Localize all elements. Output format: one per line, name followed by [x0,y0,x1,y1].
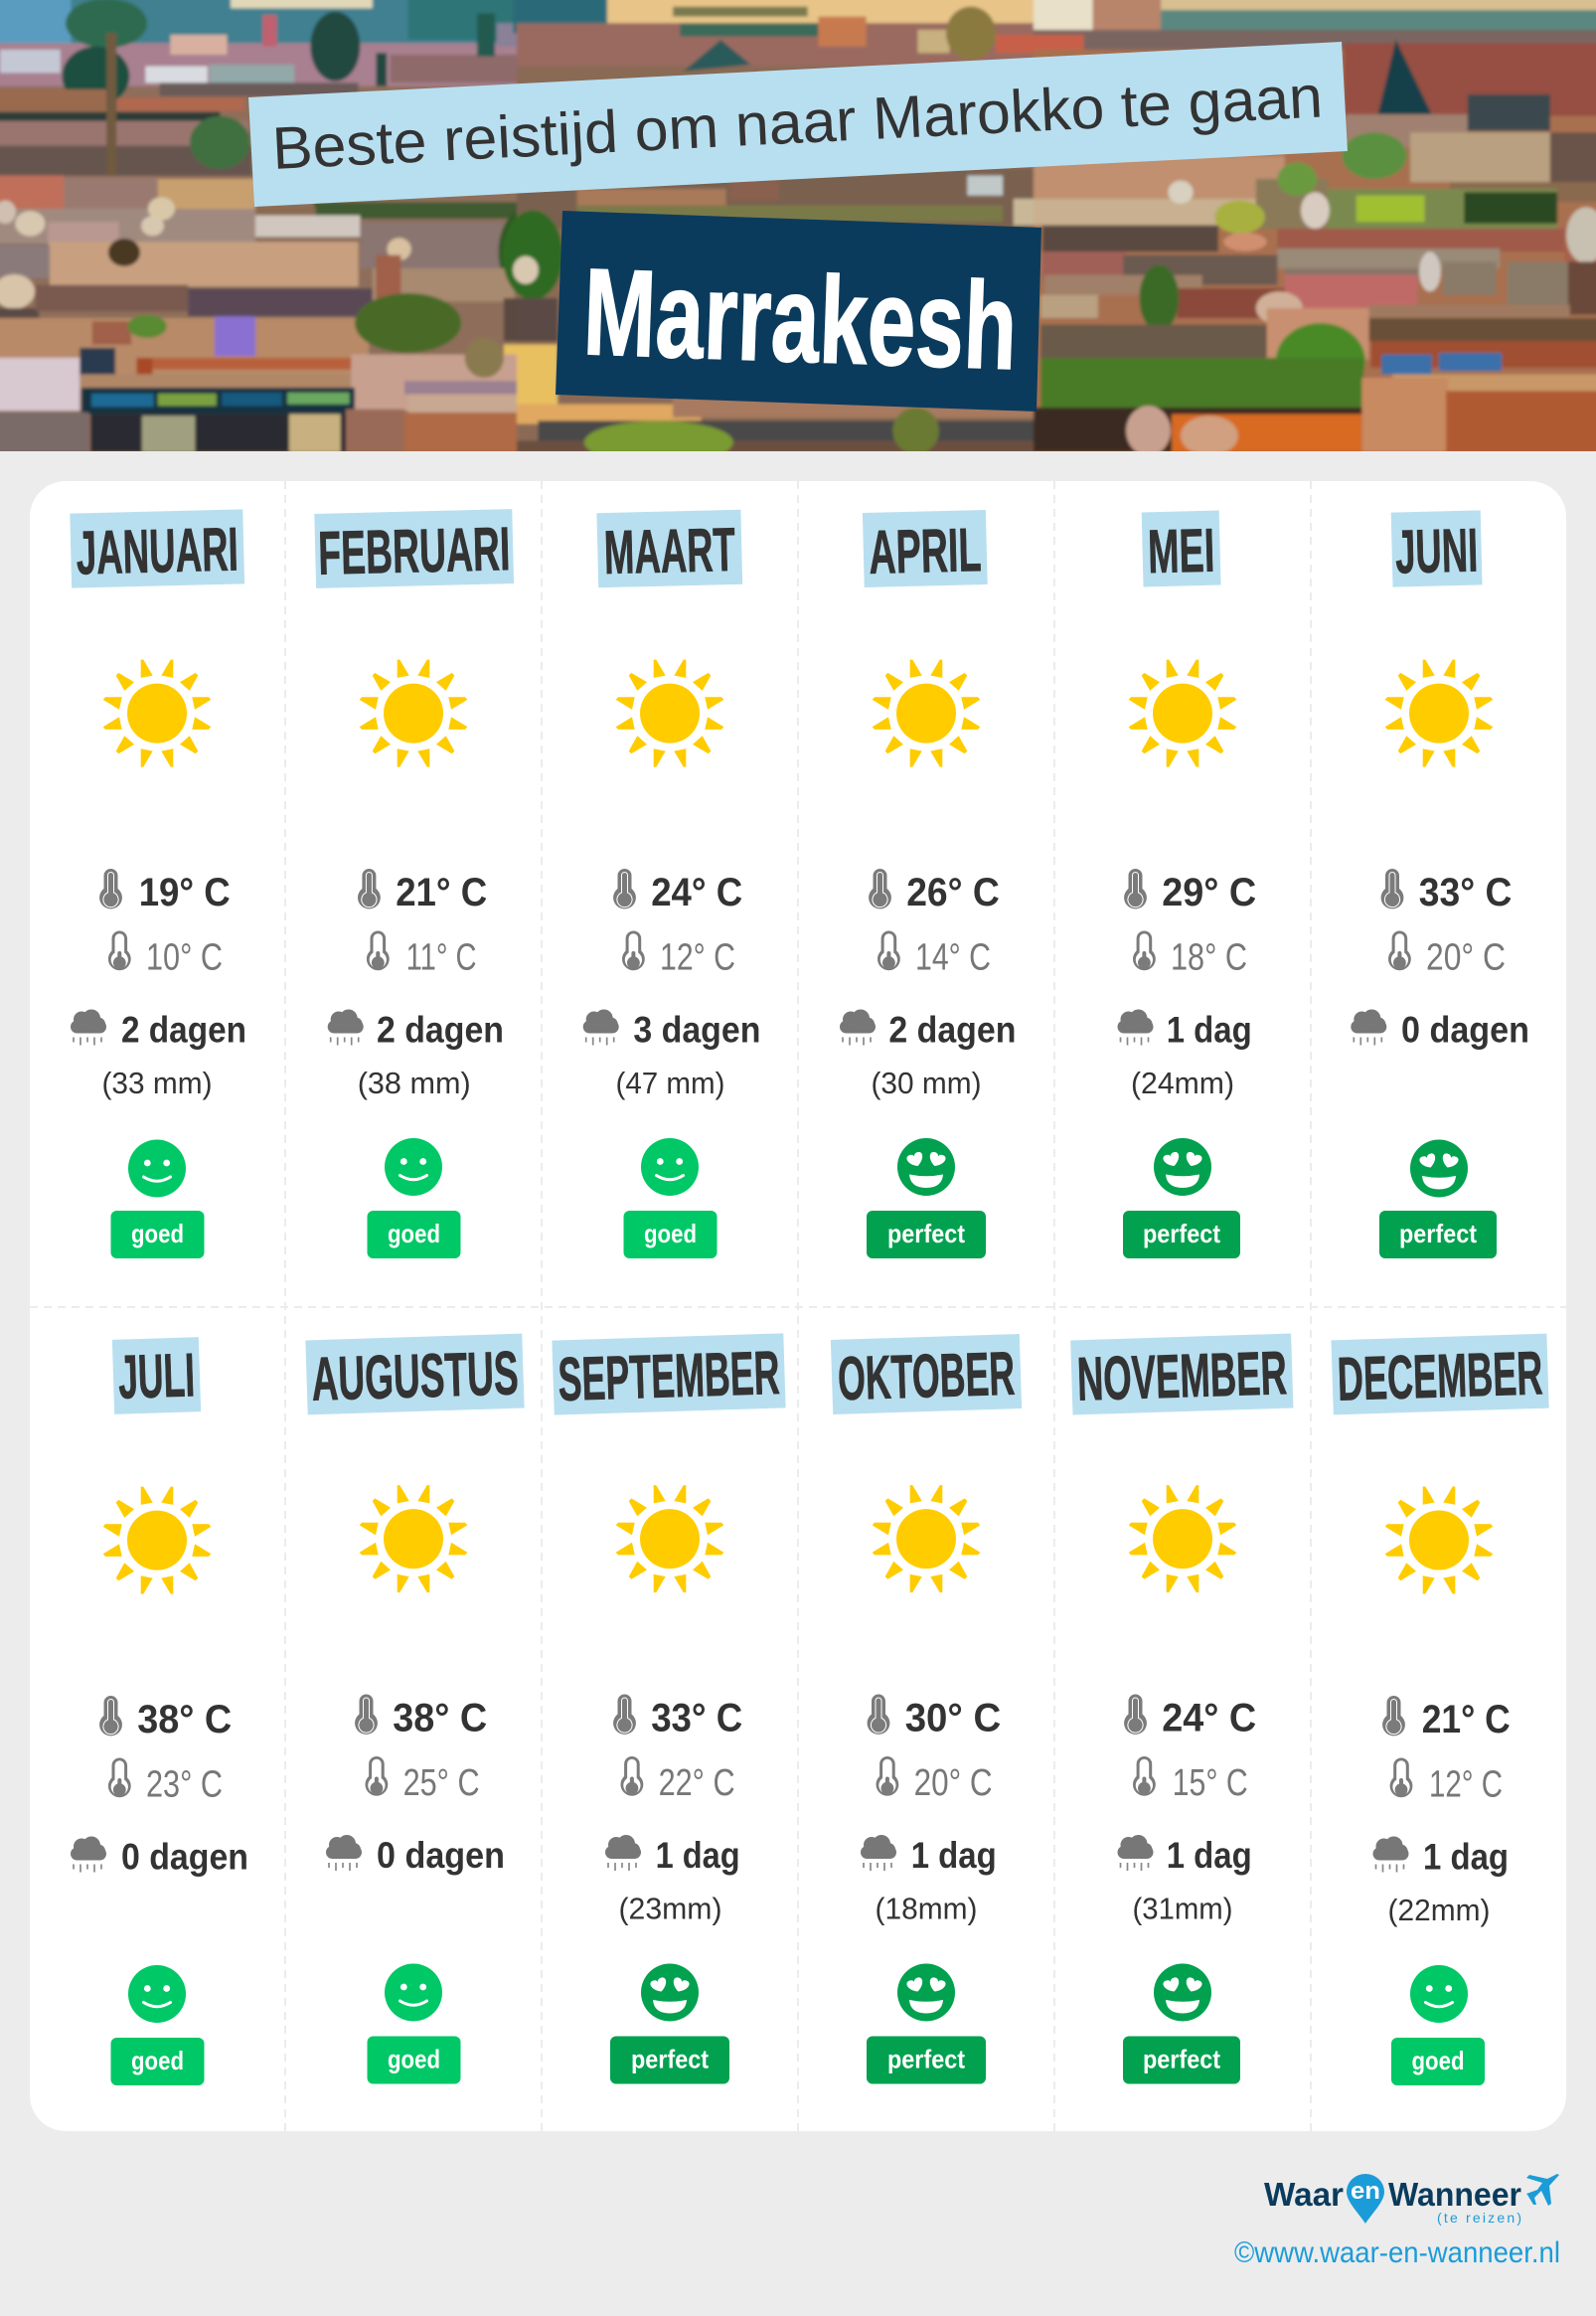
month: maart: 3 dagen [633,1010,760,1051]
month: maart: (47 mm) [616,1066,725,1100]
month: juli [71,1337,248,2085]
month: maart: 24° C [651,871,742,914]
month: februari: 21° C [396,871,487,914]
month: maart: 12° C [660,936,735,978]
month: juli: JULI [117,1341,196,1412]
month: november: 15° C [1173,1762,1248,1804]
logo: Waar en Wanneer [1264,2174,1559,2226]
month: oktober: OKTOBER [837,1340,1016,1413]
banner: title: Beste reistijd om naar Marokko te gaan [270,63,1324,182]
month: december: (22mm) [1387,1893,1491,1927]
month: oktober: 20° C [914,1762,993,1804]
month: februari [314,509,514,1258]
month: juni: JUNI [1394,516,1479,587]
logo: Waar en Wanneer: Wanneer [1388,2176,1521,2213]
month: juli: goed [131,2046,184,2075]
month: april: 2 dagen [888,1010,1016,1051]
month: januari: 10° C [146,936,223,978]
month: juli: 0 dagen [121,1837,248,1878]
month: april: APRIL [869,516,982,587]
month: februari: 11° C [406,936,477,978]
month: september: 1 dag [656,1835,740,1876]
month: november [1070,1334,1293,2083]
month: april: 14° C [915,936,991,978]
banner: city name [556,211,1041,412]
logo: Waar en Wanneer: en [1351,2178,1380,2205]
calendar panel [30,481,1566,2131]
month: november: 24° C [1162,1696,1256,1739]
month: augustus: 0 dagen [377,1835,505,1876]
website credit: ©www.waar-en-wanneer.nl [1234,2236,1560,2269]
header photo: Marrakesh rooftops [0,0,1596,464]
month: april: 26° C [906,871,1000,914]
month: januari: (33 mm) [101,1066,213,1100]
month: september: (23mm) [618,1891,721,1926]
month: juli: 38° C [137,1698,232,1741]
month: november: NOVEMBER [1076,1339,1288,1414]
month: juni: perfect [1399,1219,1477,1248]
month: september: perfect [631,2044,709,2073]
month: januari [70,509,246,1258]
month: juni: 20° C [1426,936,1506,978]
month: maart: MAART [603,516,736,587]
month: mei [1117,511,1256,1258]
month: juli: 23° C [146,1763,223,1805]
month: december [1331,1334,1549,2085]
month: juni [1351,510,1529,1258]
month: januari: 2 dagen [121,1010,246,1051]
month: november: (31mm) [1133,1891,1232,1926]
month: september: 22° C [659,1762,735,1804]
month: oktober: 30° C [905,1696,1001,1739]
month: augustus: 38° C [393,1696,487,1739]
month: maart: goed [644,1219,697,1248]
logo: Waar en Wanneer: Waar [1264,2176,1344,2213]
month: augustus [305,1334,525,2083]
month: mei: MEI [1147,517,1215,586]
month: februari: (38 mm) [358,1066,471,1100]
month: september: 33° C [651,1696,742,1739]
month: maart [583,510,760,1258]
month: december: 1 dag [1423,1837,1509,1878]
month: januari: 19° C [139,871,231,914]
month: september [552,1333,786,2083]
month: augustus: AUGUSTUS [311,1339,520,1414]
month: juni: 33° C [1419,871,1512,914]
month: december: 21° C [1422,1698,1511,1741]
month: november: perfect [1143,2044,1220,2073]
month: december: goed [1411,2046,1465,2075]
month: november: 1 dag [1167,1835,1252,1876]
month: mei: (24mm) [1131,1066,1234,1100]
month: januari: JANUARI [76,516,239,587]
month: oktober: (18mm) [875,1891,978,1926]
month: oktober [831,1334,1022,2083]
month: april: (30 mm) [871,1066,982,1100]
banner: title [248,42,1348,207]
month: januari: goed [131,1219,184,1248]
month: december: 12° C [1429,1763,1503,1805]
month: mei: 18° C [1171,936,1247,978]
month: september: SEPTEMBER [558,1339,781,1414]
month: mei: perfect [1143,1219,1220,1248]
month: oktober: 1 dag [911,1835,997,1876]
month: februari: 2 dagen [377,1010,504,1051]
month: mei: 29° C [1162,871,1256,914]
month: april [840,510,1016,1258]
month: februari: FEBRUARI [317,515,511,588]
month: februari: goed [388,1219,440,1248]
month: juni: 0 dagen [1401,1010,1529,1051]
month: mei: 1 dag [1167,1010,1252,1051]
logo: Waar en Wanneer: (te reizen) [1437,2210,1521,2226]
month: oktober: perfect [887,2044,965,2073]
banner: city name: Marrakesh [581,244,1020,396]
month: augustus: 25° C [403,1762,480,1804]
month: augustus: goed [388,2044,440,2073]
month: april: perfect [887,1219,965,1248]
